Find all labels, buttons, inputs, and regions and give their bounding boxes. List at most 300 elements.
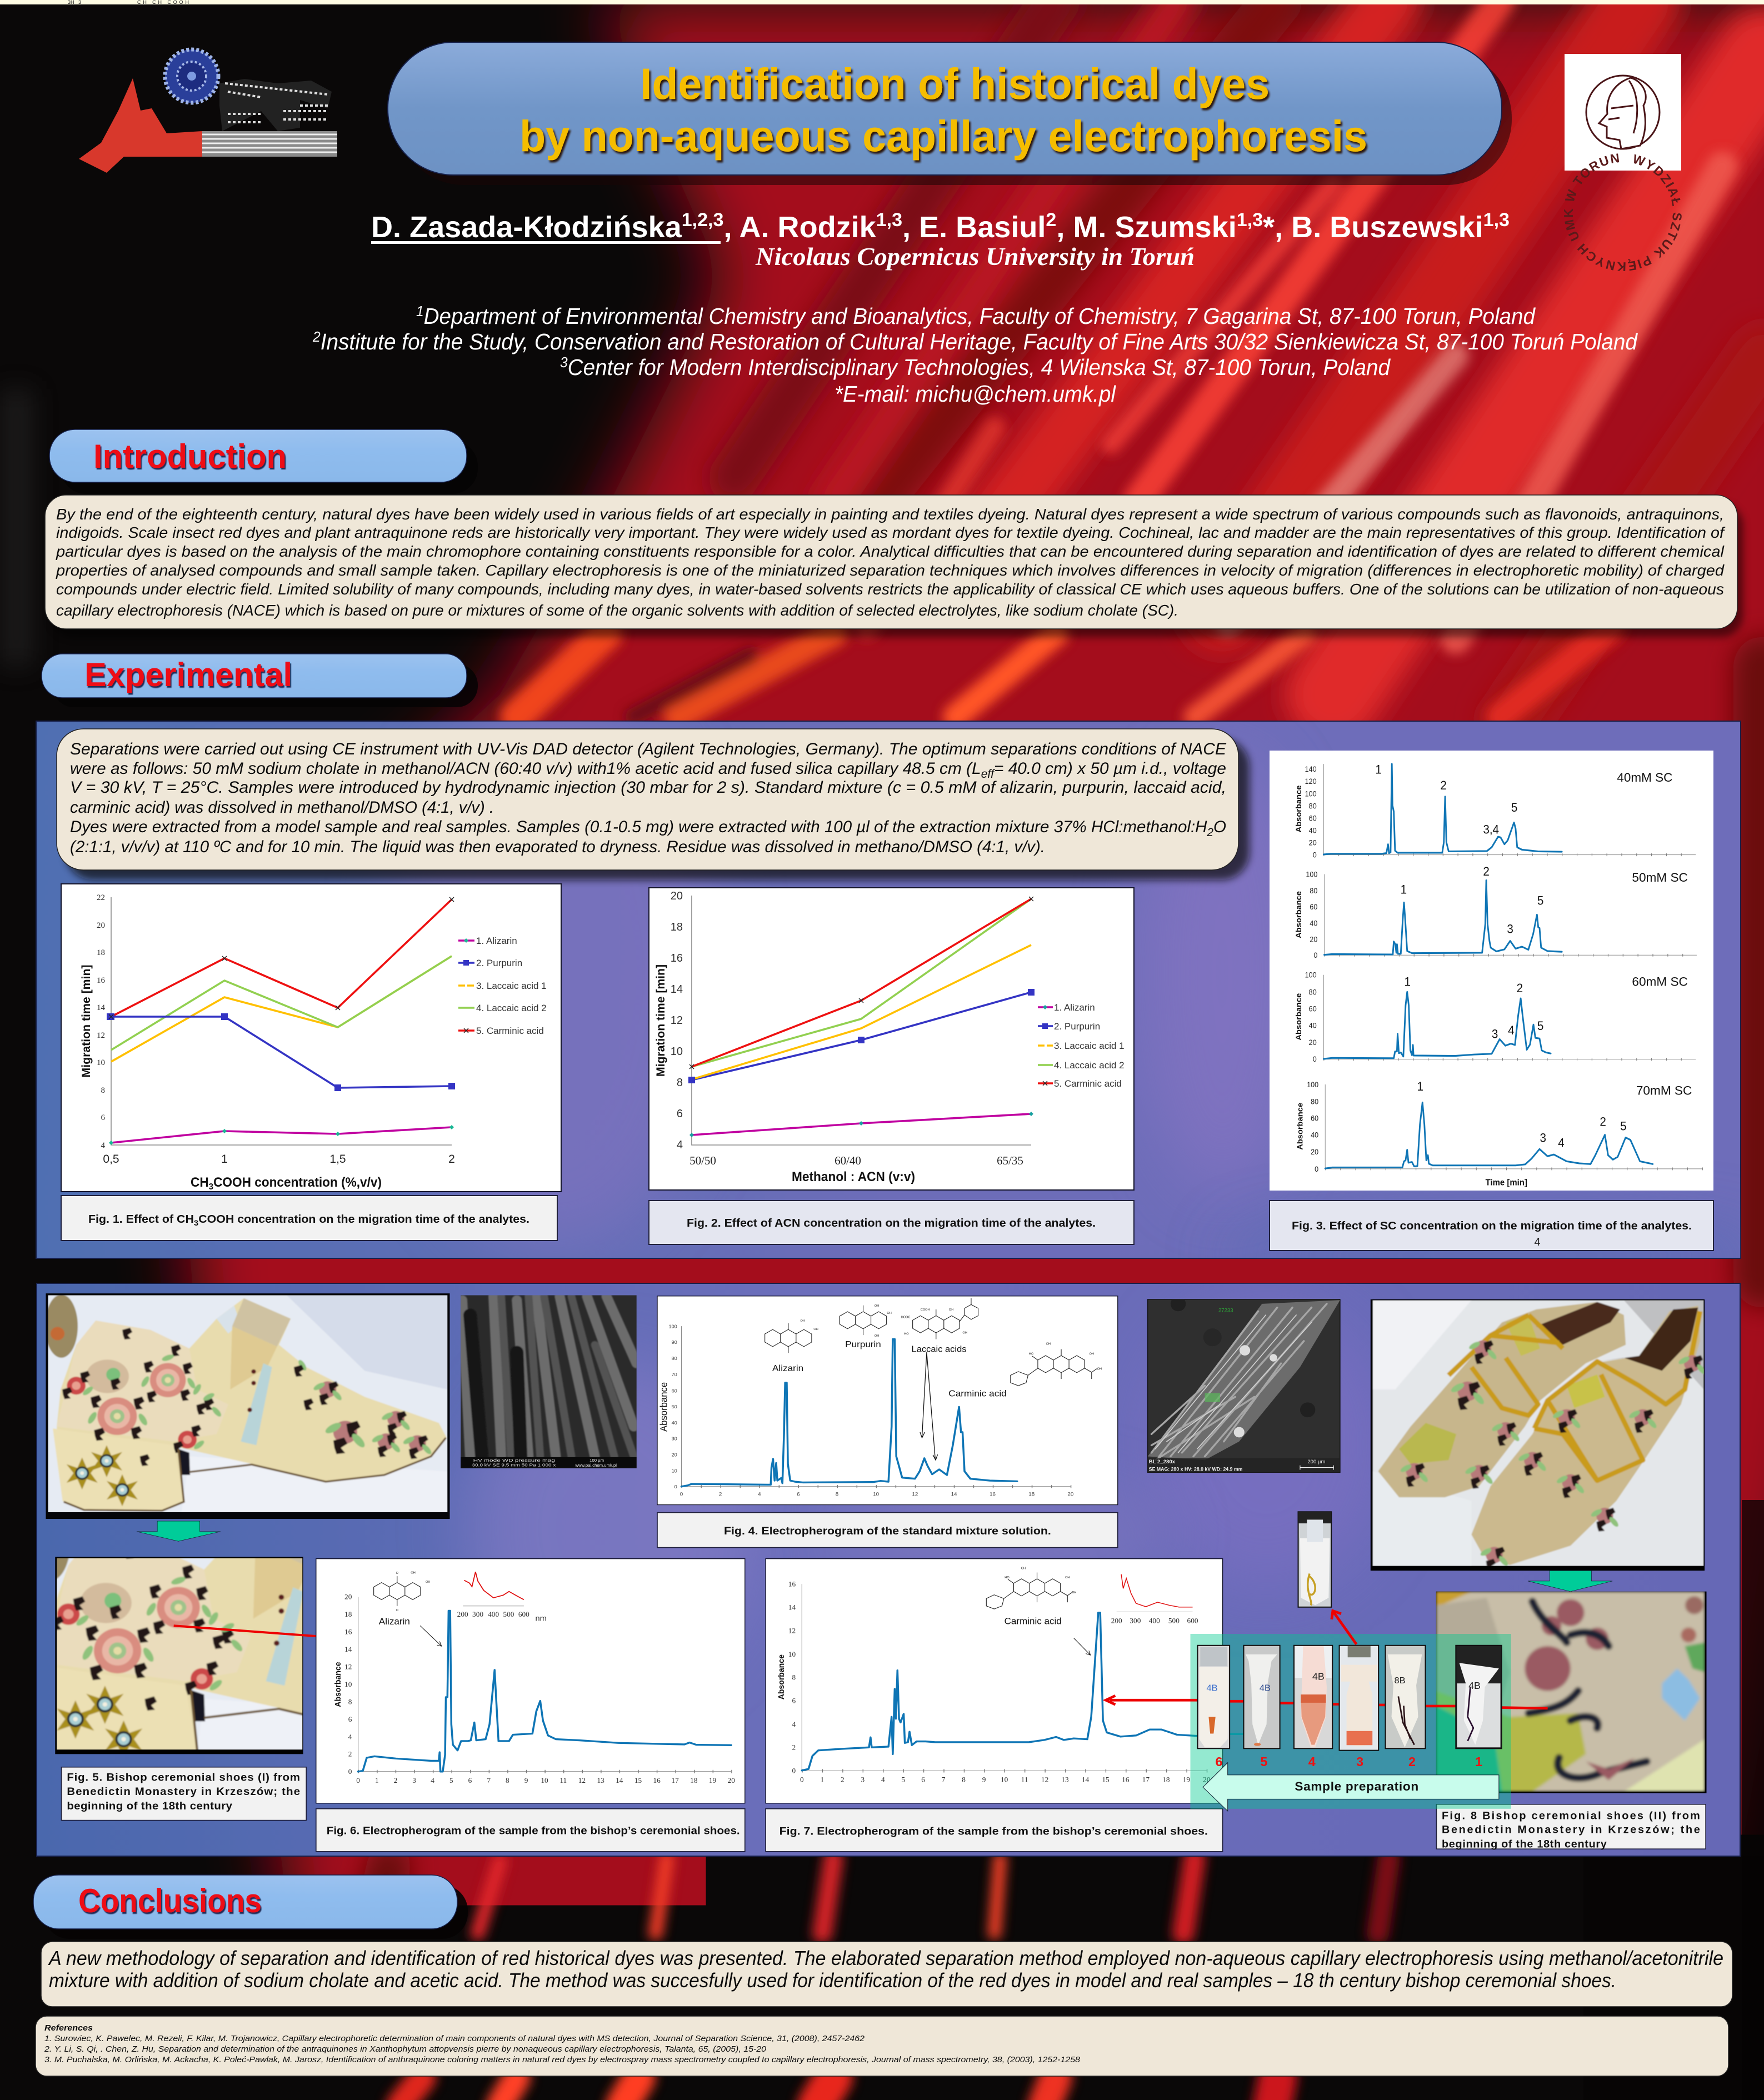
trace: 40mM SC: 0 — [1313, 851, 1317, 859]
tube 6 — [1198, 1646, 1230, 1748]
authors: 1,2,3 — [682, 209, 723, 231]
panel: experimental — [36, 694, 1764, 1289]
molecule: carminic acid: OH — [1065, 1576, 1070, 1579]
molecule: alizarin — [374, 1572, 430, 1627]
legend: 3. Laccaic acid 1 — [476, 981, 547, 991]
photo: SEM fibres I — [461, 1295, 637, 1468]
tube 2: 8B — [1395, 1676, 1406, 1686]
chart: fig 6: 18 — [690, 1776, 698, 1784]
caption: fig 3: 4 — [1534, 1236, 1541, 1248]
trace: 60mM SC: 1 — [1405, 975, 1411, 989]
spectrum: carminic UV-Vis: 600 — [1187, 1617, 1198, 1625]
spectrum: alizarin UV-Vis: nm — [536, 1614, 547, 1623]
spectrum: carminic UV-Vis: 300 — [1130, 1617, 1141, 1625]
arrow: green down — [1528, 1571, 1612, 1592]
affiliations: Department of Environmental Chemistry and Bioanalytics, Faculty of Chemistry, 7 Gagarina St, 87-100 Torun, Poland — [424, 303, 1536, 329]
arrows: laccaic peaks — [920, 1352, 938, 1460]
chart: fig 1: 10 — [97, 1058, 105, 1067]
chart: fig 6: 11 — [559, 1776, 567, 1784]
arrow: to fig 7 — [1106, 1696, 1115, 1704]
caption: fig 3: Fig. 3. Effect of SC concentration on the migration time of the analytes. — [1292, 1220, 1692, 1232]
panel: introduction text — [45, 495, 1743, 637]
caption: fig 2 — [649, 1201, 1134, 1244]
molecule: carminic acid: OH — [1097, 1368, 1102, 1371]
tube 2 — [1386, 1646, 1426, 1748]
chart: fig 6: 13 — [597, 1776, 604, 1784]
heading: Introduction: Introduction — [93, 438, 287, 475]
chart: fig 1: 1,5 — [329, 1153, 346, 1166]
authors: 1,3 — [1237, 209, 1263, 231]
chart: fig 6 — [316, 1559, 745, 1803]
trace: 40mM SC: 1 — [1375, 763, 1382, 776]
chart: fig 6: 6 — [348, 1715, 352, 1723]
spectrum: carminic UV-Vis: 400 — [1149, 1617, 1160, 1625]
molecule: alizarin: Alizarin — [379, 1616, 410, 1627]
chart: fig 7: 0 — [800, 1776, 804, 1784]
trace: 60mM SC: 5 — [1537, 1019, 1543, 1033]
chart: fig 4: 4 — [758, 1492, 761, 1497]
trace: 50mM SC — [1295, 864, 1697, 959]
chart: fig 6: 3 — [412, 1776, 416, 1784]
logo: faculty — [79, 49, 337, 173]
photo: SEM fibres II: SE MAG: 280 x HV: 28.0 kV WD: 24.9 mm — [1149, 1467, 1242, 1473]
chart: fig 6: 20 — [344, 1593, 352, 1601]
trace: 70mM SC: 80 — [1311, 1097, 1318, 1106]
legend: 5. Carminic acid — [1054, 1078, 1122, 1089]
affiliations: *E-mail: michu@chem.umk.pl — [834, 381, 1117, 407]
chart: fig 2: 18 — [671, 921, 683, 933]
affiliations: Institute for the Study, Conservation and Restoration of Cultural Heritage, Faculty of Fine Arts 30/32 Sienkiewicza St, 87-100 Toruń Poland — [321, 329, 1638, 354]
arrow: sample preparation: Sample preparation — [1295, 1779, 1418, 1793]
photo: SEM fibres I: www.pai.chem.umk.pl — [574, 1463, 617, 1468]
chart: fig 6: 8 — [348, 1698, 352, 1706]
panel: introduction text: compounds under electric field. Limited solubility of many compounds, including many dyes, in water-based solvents restricts the applicability of classical CE which uses aqueous buffers. One of the solutions can be utilization of non-aqueous — [56, 581, 1724, 598]
panel: introduction text: properties of analysed compounds and small sample taken. Capillary electrophoresis is one of the miniaturized separation techniques which involves differences in velocity of migration (differences in electrophoretic mobility) of charged — [56, 562, 1725, 579]
molecule: laccaic acid: OH — [962, 1332, 967, 1334]
chart: fig 2: Methanol : ACN (v:v) — [792, 1169, 915, 1184]
chart: fig 7: 14 — [788, 1603, 796, 1611]
chart: fig 1: 4 — [101, 1141, 106, 1150]
trace: 50mM SC: 1 — [1401, 883, 1407, 897]
molecule: laccaic acid — [901, 1298, 978, 1354]
molecule: alizarin — [765, 1319, 818, 1373]
heading: Conclusions: Conclusions — [78, 1882, 262, 1919]
chart: fig 6: 12 — [344, 1663, 352, 1671]
chart: fig 7: 13 — [1061, 1776, 1069, 1784]
molecule: carminic acid: Carminic acid — [948, 1389, 1007, 1399]
spectrum: carminic UV-Vis: 200 — [1111, 1617, 1122, 1625]
trace: 60mM SC: 40 — [1309, 1021, 1317, 1029]
chart: fig 6: 7 — [487, 1776, 491, 1784]
step numbers: 5 — [1260, 1754, 1267, 1769]
step numbers: 3 — [1356, 1754, 1363, 1769]
chart: fig 7: 2 — [792, 1743, 796, 1751]
caption: fig 4: Fig. 4. Electropherogram of the standard mixture solution. — [724, 1526, 1051, 1537]
chart: fig 7: 1 — [821, 1776, 824, 1784]
arrow: to carminic peak — [1074, 1638, 1091, 1655]
panel: introduction text: indigoids. Scale insect red dyes and plant antraquinone reds are historically very important. They were widely used as mordant dyes for textile dyeing. Cochineal, lac and madder are the main representatives of this group. Identification of — [56, 524, 1726, 541]
heading: Experimental — [42, 654, 478, 707]
trace: 50mM SC: 5 — [1537, 894, 1543, 908]
chart: fig 1: 1 — [221, 1153, 228, 1166]
caption: fig 8: Benedictin Monastery in Krzeszów; the — [1442, 1824, 1700, 1836]
chart: fig 6: 18 — [344, 1610, 352, 1618]
chart: fig 6: 6 — [468, 1776, 472, 1784]
chart: fig 6: 10 — [541, 1776, 548, 1784]
chart: fig 4: 60 — [672, 1388, 677, 1393]
chart: fig 4: 8 — [836, 1492, 838, 1497]
molecule: laccaic acid: HOOC — [901, 1316, 910, 1319]
trace: 40mM SC: 40 — [1309, 826, 1317, 835]
caption: fig 6: Fig. 6. Electropherogram of the sample from the bishop’s ceremonial shoes. — [327, 1825, 740, 1837]
molecule: purpurin — [839, 1304, 892, 1349]
chart: fig 7: 8 — [962, 1776, 966, 1784]
chart: fig 6: Absorbance — [334, 1662, 343, 1707]
tube 5 — [1243, 1646, 1280, 1748]
step numbers: 1 — [1475, 1754, 1482, 1769]
trace: 60mM SC: 100 — [1305, 971, 1317, 979]
chart: fig 6: 15 — [634, 1776, 642, 1784]
caption: fig 5: Fig. 5. Bishop ceremonial shoes (I) from — [67, 1772, 300, 1783]
chart: fig 2: 14 — [671, 983, 683, 996]
chart: fig 7: 4 — [792, 1720, 796, 1728]
legend: 1. Alizarin — [1054, 1002, 1095, 1013]
trace: 60mM SC: 80 — [1309, 988, 1317, 996]
icon: helmeted head — [1599, 78, 1646, 149]
trace: 50mM SC: 2 — [1483, 864, 1490, 878]
step numbers: 4 — [1308, 1754, 1316, 1769]
molecule: carminic acid: Carminic acid — [1005, 1616, 1062, 1626]
chart: fig 7: 8 — [792, 1673, 796, 1681]
text block: method description: Dyes were extracted from a model sample and real samples. Samples (0.1-0.5 mg) were extracted with 100 µl of the extraction mixture 37% HCl:methanol:H — [70, 818, 1225, 836]
trace: 60mM SC: 3 — [1492, 1027, 1498, 1041]
caption: fig 2: Fig. 2. Effect of ACN concentration on the migration time of the analytes. — [687, 1217, 1096, 1229]
arrow: to alizarin peak — [420, 1626, 442, 1646]
trace: 40mM SC: 80 — [1309, 802, 1317, 810]
chart: fig 7: 12 — [788, 1627, 796, 1635]
trace: 60mM SC: 20 — [1309, 1038, 1317, 1047]
spectrum: alizarin UV-Vis: 600 — [518, 1610, 529, 1618]
molecule: purpurin: Purpurin — [845, 1340, 881, 1349]
chart: fig 2: 65/35 — [997, 1154, 1023, 1167]
chart: fig 6: 0 — [348, 1767, 352, 1776]
chart: fig 6: 4 — [348, 1733, 352, 1741]
trace: 40mM SC: 40mM SC — [1617, 770, 1672, 784]
panel: conclusions text: mixture with addition of sodium cholate and acetic acid. The method was succesfully used for identification of the red dyes in model and real samples – 18 th century bishop ceremonial shoes. — [49, 1969, 1616, 1992]
text block: method description: Separations were carried out using CE instrument with UV-Vis DAD detector (Agilent Technologies, Germany). The optimum separations conditions of NACE — [70, 740, 1227, 758]
tube 4: 4B — [1312, 1671, 1325, 1682]
chart: fig 4: 6 — [797, 1492, 800, 1497]
panel: references — [36, 2016, 1728, 2076]
trace: 70mM SC: 60 — [1311, 1114, 1318, 1123]
affiliations: 3 — [560, 354, 568, 371]
authors: 1,3 — [1483, 209, 1510, 231]
text block: method description: = 40.0 cm) x 50 µm i.d., voltage — [994, 759, 1226, 778]
panel: references: 1. Surowiec, K. Pawelec, M. Rezeli, F. Kilar, M. Trojanowicz, Capillary electrophoretic determination of main components of natural dyes with MS detection, Journal of Separation Science, 31, (2008), 2457-2462 — [44, 2034, 865, 2043]
trace: 50mM SC: 3 — [1507, 922, 1513, 936]
tube 5: 4B — [1260, 1683, 1271, 1693]
chart: fig 6: 0 — [356, 1776, 360, 1784]
chart: fig 6: 14 — [616, 1776, 623, 1784]
chart: fig 7: 3 — [861, 1776, 864, 1784]
molecule: alizarin: OH — [813, 1328, 818, 1331]
overlay: sample preparation — [1106, 1611, 1548, 1811]
trace: 40mM SC: 20 — [1309, 838, 1317, 847]
chart: fig 6: 19 — [709, 1776, 716, 1784]
chart: fig 4: 12 — [912, 1492, 918, 1497]
molecule: laccaic acid: Laccaic acids — [912, 1344, 967, 1354]
molecule: carminic acid: HO — [1029, 1353, 1033, 1356]
chart: fig 7: 15 — [1102, 1776, 1110, 1784]
chart: fig 7: 10 — [1001, 1776, 1008, 1784]
authors: 2 — [1046, 209, 1056, 231]
chart: fig 1: CH — [191, 1175, 210, 1190]
chart: fig 4: 90 — [672, 1339, 677, 1345]
chart: fig 4: 20 — [1067, 1492, 1073, 1497]
legend: 2. Purpurin — [1054, 1021, 1100, 1032]
chart: fig 6: 10 — [344, 1680, 352, 1688]
chart: fig 7: 4 — [881, 1776, 885, 1784]
trace: 70mM SC: 1 — [1417, 1079, 1423, 1093]
spectrum: carminic UV-Vis — [1111, 1574, 1198, 1625]
trace: 70mM SC: 0 — [1315, 1164, 1318, 1173]
step numbers: 6 — [1215, 1754, 1222, 1769]
chart: fig 4: 20 — [672, 1452, 677, 1457]
chart: fig 1: COOH concentration (%,v/v) — [213, 1175, 382, 1190]
title text: Identification of historical dyes — [640, 59, 1270, 108]
chart: fig 4: 70 — [672, 1372, 677, 1377]
legend: 3. Laccaic acid 1 — [1054, 1041, 1125, 1051]
chart: fig 6: 4 — [431, 1776, 434, 1784]
chart: fig 1: 12 — [97, 1031, 105, 1040]
trace: 60mM SC: Absorbance — [1295, 993, 1303, 1041]
chart: fig 4: 100 — [669, 1324, 677, 1329]
chart: fig 7: 12 — [1041, 1776, 1048, 1784]
title banner — [388, 42, 1512, 185]
chart: fig 1: 22 — [97, 893, 105, 902]
caption: fig 5: Benedictin Monastery in Krzeszów; the — [67, 1786, 300, 1798]
panel: introduction text: By the end of the eighteenth century, natural dyes have been widely used in various fields of art especially in painting and textiles dyeing. Natural dyes represent a wide spectrum of various compounds such as flavonoids, antraquinons, — [56, 506, 1724, 523]
trace: 50mM SC: 40 — [1310, 919, 1317, 928]
molecule: carminic acid: OH — [1072, 1591, 1076, 1594]
molecule: alizarin: O — [396, 1572, 398, 1575]
chart: fig 2: 20 — [671, 890, 683, 902]
chart: fig 1: 18 — [97, 948, 105, 957]
text block: method description: (2:1:1, v/v/v) at 110 ºC and for 10 min. The liquid was then evaporated to dryness. Residue was dissolved in methano/DMSO (4:1, v/v). — [70, 838, 1045, 856]
chart: fig 6: 16 — [653, 1776, 661, 1784]
tube 4 — [1294, 1646, 1332, 1748]
photo: bishop shoe I — [33, 1278, 462, 1523]
spectrum: alizarin UV-Vis: 300 — [472, 1610, 484, 1618]
chart: fig 2: 10 — [671, 1046, 683, 1058]
chart: fig 1: 20 — [97, 921, 105, 930]
chart: fig 2: 6 — [677, 1108, 683, 1120]
authors — [371, 209, 1510, 244]
chart: fig 6: 8 — [506, 1776, 509, 1784]
trace: 70mM SC: 4 — [1558, 1136, 1565, 1150]
trace: 40mM SC: 5 — [1511, 801, 1517, 814]
chart: fig 6: 9 — [524, 1776, 528, 1784]
university: Nicolaus Copernicus University in Toruń — [755, 243, 1195, 271]
step numbers — [1215, 1754, 1482, 1769]
molecule: purpurin: OH — [874, 1304, 879, 1308]
caption: fig 7: Fig. 7. Electropherogram of the sample from the bishop’s ceremonial shoes. — [779, 1826, 1208, 1838]
chart: fig 1: 0,5 — [103, 1153, 119, 1166]
tube 3 — [1340, 1646, 1378, 1751]
caption: fig 4 — [657, 1513, 1118, 1548]
spectrum: alizarin UV-Vis: 400 — [488, 1610, 499, 1618]
trace: 70mM SC: 70mM SC — [1636, 1083, 1692, 1098]
affiliations — [312, 303, 1638, 407]
chart: fig 4: 0 — [680, 1492, 683, 1497]
chart: fig 4: 2 — [719, 1492, 722, 1497]
chart: fig 4: 10 — [672, 1468, 677, 1473]
molecule: carminic acid: OH — [1046, 1343, 1051, 1346]
chart: fig 6: 1 — [375, 1776, 379, 1784]
chart: fig 1: Migration time [min] — [80, 964, 93, 1078]
chart: fig 1: 2 — [448, 1153, 455, 1166]
chart: fig 2: 60/40 — [834, 1154, 861, 1167]
chart: fig 6: 12 — [578, 1776, 586, 1784]
legend: 1. Alizarin — [476, 936, 517, 946]
trace: 40mM SC: 100 — [1305, 789, 1317, 798]
chart: fig 1 — [61, 884, 561, 1192]
chart: fig 4: 50 — [672, 1404, 677, 1409]
molecule: alizarin: O — [396, 1609, 398, 1612]
chart: fig 2: Migration time [min] — [654, 964, 667, 1077]
chart: fig 4 — [657, 1296, 1118, 1505]
chart: fig 1: 16 — [97, 976, 106, 985]
chart: fig 2: 16 — [671, 952, 683, 964]
icon: red mountain — [79, 78, 202, 173]
chart: fig 7: 19 — [1183, 1776, 1190, 1784]
trace: 70mM SC: 3 — [1540, 1131, 1546, 1145]
chart: fig 7: 6 — [792, 1697, 796, 1705]
caption: fig 5: beginning of the 18th century — [67, 1801, 232, 1812]
arrow: sample preparation — [1203, 1763, 1499, 1811]
trace: 60mM SC: 2 — [1517, 981, 1523, 995]
chart: fig 6: 20 — [728, 1776, 735, 1784]
trace: 50mM SC: 80 — [1310, 886, 1317, 895]
authors: D. Zasada-Kłodzińska — [371, 211, 681, 244]
chart: fig 7: 0 — [792, 1767, 796, 1774]
spectrum: carminic UV-Vis: 500 — [1168, 1617, 1180, 1625]
heading: Experimental: Experimental — [84, 656, 292, 693]
trace: 60mM SC: 4 — [1508, 1023, 1515, 1037]
trace: 60mM SC: 0 — [1313, 1055, 1317, 1063]
molecule: carminic acid — [948, 1343, 1102, 1399]
caption: fig 1: Fig. 1. Effect of CH — [88, 1213, 187, 1226]
chart: fig 7: 20 — [1203, 1776, 1211, 1784]
icon: factory skyline — [202, 79, 337, 157]
text block: method description: were as follows: 50 mM sodium cholate in methanol/ACN (60:40 v/v) with1% acetic acid and fused silica capillary 48.5 cm (L — [70, 759, 985, 778]
affiliations: 2 — [312, 328, 321, 345]
chart: fig 4: 30 — [672, 1436, 677, 1442]
text block: method description: eff — [981, 768, 995, 781]
trace: 40mM SC: 60 — [1309, 814, 1317, 822]
chart: fig 6: 5 — [449, 1776, 453, 1784]
legend — [458, 936, 547, 1036]
chart: fig 1: 8 — [101, 1086, 105, 1095]
legend — [1038, 1002, 1125, 1089]
title text — [519, 59, 1367, 161]
authors: , A. Rodzik — [723, 211, 877, 244]
trace: 40mM SC: 2 — [1440, 778, 1447, 792]
chart: fig 7: 6 — [921, 1776, 925, 1784]
trace: 70mM SC — [1296, 1079, 1703, 1173]
chart: fig 2: 12 — [671, 1014, 683, 1027]
text block: method description: V = 30 kV, T = 25°C. Samples were introduced by hydrodynamic injection (30 mbar for 2 s). Standard mixture (c = 0.5 mM of alizarin, purpurin, laccaid acid, — [70, 778, 1226, 797]
chart: fig 6: 14 — [344, 1645, 352, 1653]
title text: by non-aqueous capillary electrophoresis — [519, 111, 1367, 161]
chart: fig 3 — [1270, 751, 1713, 1191]
chart: fig 3: Time [min] — [1486, 1178, 1527, 1187]
arrow: to tube — [1332, 1611, 1356, 1644]
chart: fig 1: 3 — [209, 1182, 213, 1192]
chart: fig 4: 18 — [1028, 1492, 1035, 1497]
chart: fig 4: Absorbance — [658, 1382, 669, 1432]
arrow: red sample arrow — [174, 1626, 327, 1642]
caption: fig 8 — [1436, 1804, 1706, 1850]
heading: Conclusions — [33, 1875, 468, 1939]
affiliations: Center for Modern Interdisciplinary Technologies, 4 Wilenska St, 87-100 Torun, Poland — [568, 354, 1391, 380]
trace: 50mM SC: 100 — [1306, 870, 1317, 879]
chart: fig 4: 0 — [674, 1484, 677, 1489]
authors: 1,3 — [876, 209, 902, 231]
caption: fig 7 — [766, 1809, 1223, 1852]
photo: bishop shoes II — [1371, 1299, 1707, 1571]
photo: tube with thread — [1298, 1512, 1331, 1607]
chart: fig 4: 80 — [672, 1356, 677, 1361]
caption: fig 6 — [316, 1809, 745, 1852]
chart: fig 7: 16 — [1122, 1776, 1130, 1784]
photo: SEM fibres I: HV mode WD pressure mag — [473, 1458, 555, 1463]
authors: *, B. Buszewski — [1263, 211, 1483, 244]
photo: SEM fibres I: 30.0 kV SE 9.5 mm 50 Pa 1 000 x — [472, 1463, 556, 1468]
chart: fig 7: 16 — [788, 1580, 796, 1588]
panel: references: References — [44, 2023, 93, 2033]
caption: fig 5 — [62, 1767, 306, 1821]
tube 1: 4B — [1468, 1680, 1481, 1691]
molecule: alizarin: OH — [426, 1581, 430, 1584]
trace: 70mM SC: 2 — [1600, 1115, 1606, 1129]
trace: 50mM SC: Absorbance — [1295, 891, 1303, 938]
trace: 60mM SC: 60 — [1309, 1004, 1317, 1013]
top strip with clipped text — [0, 0, 1764, 5]
trace: 70mM SC: 20 — [1311, 1148, 1318, 1156]
trace: 40mM SC: Absorbance — [1295, 785, 1303, 832]
chart: fig 6: 2 — [394, 1776, 397, 1784]
chart: fig 7: 10 — [788, 1650, 796, 1658]
chart: fig 1: 14 — [97, 1003, 106, 1012]
arrow: green down — [137, 1521, 221, 1541]
trace: 40mM SC — [1295, 763, 1696, 859]
legend: 5. Carminic acid — [476, 1026, 544, 1036]
chart: fig 2: 50/50 — [689, 1154, 716, 1167]
photo: SEM fibres II: 27233 — [1218, 1308, 1233, 1314]
spectrum: alizarin UV-Vis: 500 — [503, 1610, 514, 1618]
molecule: laccaic acid: OH — [949, 1308, 953, 1312]
chart: fig 7 — [766, 1559, 1247, 1803]
trace: 50mM SC: 0 — [1313, 951, 1317, 959]
caption: fig 8: beginning of the 18th century — [1442, 1838, 1607, 1850]
trace: 60mM SC — [1295, 971, 1696, 1063]
molecule: carminic acid — [986, 1567, 1076, 1626]
molecule: laccaic acid: HO — [904, 1333, 909, 1336]
trace: 70mM SC: 40 — [1311, 1131, 1318, 1139]
panel: introduction text: particular dyes is based on the analysis of the main chromophore containing constituents responsible for a color. Analytical difficulties that can be encountered during separation and identification of dyes are related to different chemical — [56, 543, 1725, 560]
legend: 4. Laccaic acid 2 — [476, 1003, 547, 1013]
